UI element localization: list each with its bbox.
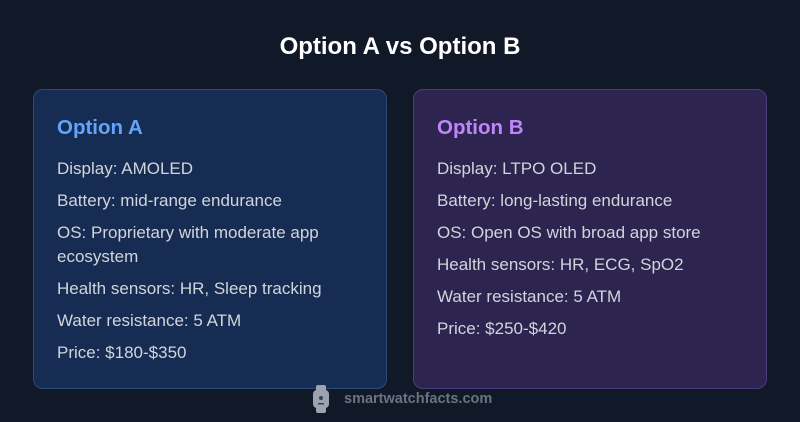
icon: watch — [313, 385, 329, 413]
text: water: Water resistance: 5 ATM — [57, 311, 241, 330]
text: health: Health sensors: HR, ECG, SpO2 — [437, 255, 684, 274]
text: price: Price: $180-$350 — [57, 343, 186, 362]
text: OS: OS: Open OS with broad app store — [437, 223, 701, 242]
text: health: Health sensors: HR, Sleep tracking — [57, 279, 322, 298]
panel: option A — [33, 89, 387, 389]
text: display: Display: AMOLED — [57, 159, 193, 178]
text: price: Price: $250-$420 — [437, 319, 566, 338]
heading: option B: Option B — [437, 116, 524, 139]
title: Option A vs Option B — [280, 33, 520, 60]
heading: option A: Option A — [57, 116, 143, 139]
panel: option B — [413, 89, 767, 389]
text: site: smartwatchfacts.com — [344, 391, 492, 407]
footer — [313, 385, 492, 413]
text: battery: Battery: long-lasting endurance — [437, 191, 672, 210]
text: OS: OS: Proprietary with moderate app ecosystem — [57, 223, 319, 266]
text: battery: Battery: mid-range endurance — [57, 191, 282, 210]
text: display: Display: LTPO OLED — [437, 159, 596, 178]
text: water: Water resistance: 5 ATM — [437, 287, 621, 306]
